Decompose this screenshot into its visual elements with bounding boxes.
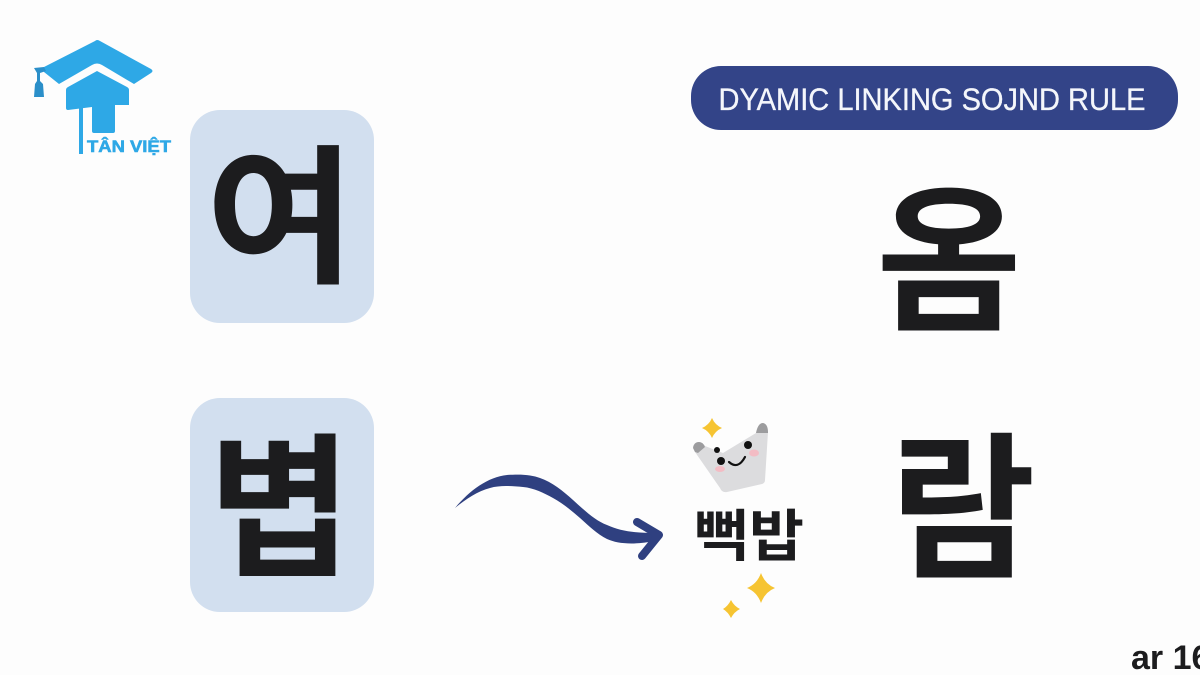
panel: top left tile with 여 [190,110,374,323]
syllable 옴: 옴 [876,176,1022,352]
mascot: rice character with sparkles [693,418,804,618]
icon: graduation cap [42,40,152,84]
icon: arrow [66,71,129,133]
heading pill [691,66,1178,130]
logo text: TÂN VIỆT [87,137,172,156]
syllable 람: 람 [890,423,1036,599]
label 뻑밥: 뻑밥 [694,505,804,568]
icon: logo stem [79,107,83,154]
syllable 볍: 볍 [208,424,352,598]
icon: sparkle large [747,573,775,603]
icon: tassel [34,67,46,97]
panel: bottom left tile with 볍 [190,398,374,612]
icon: sparkle top [702,418,722,438]
syllable 여: 여 [206,135,356,303]
logo: Tan Viet graduation cap [34,40,172,156]
icon: mascot body [693,423,768,492]
arrow: curved navy arrow [455,475,659,556]
heading text: DYAMIC LINKING SOJND RULE [718,81,1146,117]
icon: sparkle small [723,600,740,618]
